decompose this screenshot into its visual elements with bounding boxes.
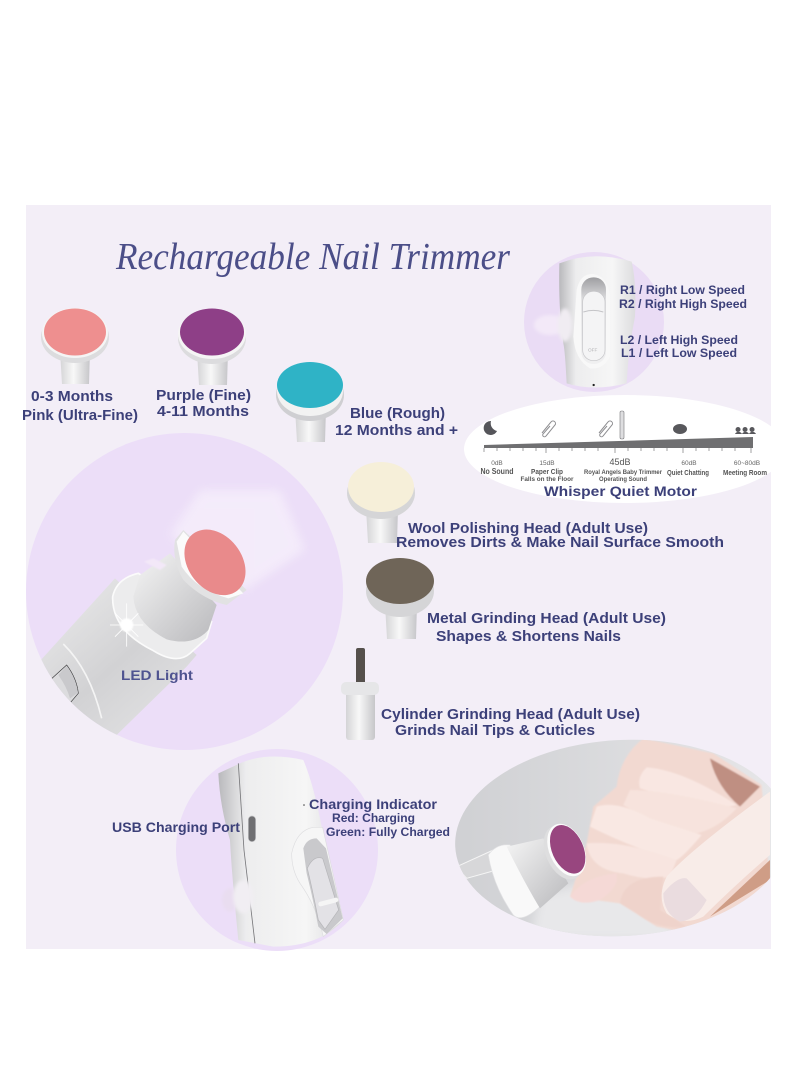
text: charging indicator: Charging Indicator (309, 797, 438, 812)
text: pink head label: 0-3 Months (31, 389, 113, 405)
icon: pink ultra-fine head (41, 308, 109, 384)
text: decibel labels: Meeting Room (723, 468, 767, 477)
text: cylinder head label (381, 707, 640, 739)
text: metal head label: Shapes & Shortens Nails (436, 629, 621, 645)
panel: baby hand photo (450, 735, 775, 940)
text: decibel labels: Falls on the Floor (520, 476, 574, 483)
icon: blue rough head (276, 362, 344, 442)
text: cylinder head label: Cylinder Grinding Head (Adult Use) (381, 707, 640, 723)
text: decibel labels: 0dB (491, 460, 503, 467)
icon: trimmer body with pink head (42, 530, 246, 735)
icon: moon (484, 421, 497, 435)
text: purple head label (156, 388, 251, 420)
text: decibel labels: 60~80dB (734, 460, 760, 467)
panel: background (26, 205, 771, 949)
panel: LED light circle (17, 433, 343, 750)
icon: trimmer with purple head (460, 824, 586, 918)
text: speed labels: R2 / Right High Speed (619, 297, 747, 311)
panel: charging circle (176, 749, 378, 951)
text: pink head label (22, 389, 138, 424)
text: purple head label: 4-11 Months (157, 404, 249, 420)
text: decibel labels: Royal Angels Baby Trimmer (584, 469, 662, 476)
text: decibel labels (480, 457, 767, 483)
chart: decibel scale (484, 437, 753, 453)
text: whisper quiet motor heading: Whisper Quiet Motor (544, 483, 698, 499)
text: decibel labels: 15dB (539, 460, 555, 467)
text: blue head label (335, 406, 458, 439)
text: metal head label (427, 611, 666, 645)
panel: speed switch circle (524, 252, 664, 392)
icon: paper clip operating (599, 421, 612, 437)
icon: baby hand (570, 738, 770, 933)
icon: people (735, 427, 756, 434)
icon: wool polishing head (347, 462, 415, 543)
text: decibel labels: Operating Sound (599, 476, 647, 483)
text: charging indicator: Red: Charging (332, 813, 415, 825)
icon: trimmer switch: OFF (588, 348, 597, 353)
text: blue head label: 12 Months and + (335, 423, 458, 439)
text: USB charging port: USB Charging Port (112, 820, 241, 835)
text: metal head label: Metal Grinding Head (Adult Use) (427, 611, 666, 627)
icon: cylinder grinding head (341, 648, 379, 740)
text: decibel labels: 60dB (681, 460, 697, 467)
icon: small trimmer (620, 411, 624, 439)
text: blue head label: Blue (Rough) (350, 406, 445, 422)
text: decibel labels: Paper Clip (531, 469, 563, 476)
text: charging indicator (309, 797, 450, 839)
icon: light beam (175, 491, 300, 586)
text: decibel labels: No Sound (480, 467, 514, 476)
text: LED light label: LED Light (121, 667, 193, 683)
text: speed labels: L1 / Left Low Speed (621, 346, 737, 360)
text: charging indicator: Green: Fully Charged (326, 827, 450, 839)
text: cylinder head label: Grinds Nail Tips & Cuticles (395, 723, 595, 739)
text: wool head label (396, 521, 724, 551)
panel: whisper quiet motor (464, 395, 786, 503)
text: purple head label: Purple (Fine) (156, 388, 251, 404)
icon: paper clip quiet (542, 421, 555, 437)
text: decibel labels: Quiet Chatting (667, 468, 709, 477)
icon: metal grinding head (366, 558, 434, 639)
text: speed labels (619, 283, 747, 360)
title: Rechargeable Nail Trimmer (115, 236, 510, 278)
text: speed labels: R1 / Right Low Speed (620, 283, 745, 297)
text: pink head label: Pink (Ultra-Fine) (22, 408, 138, 424)
text: speed labels: L2 / Left High Speed (620, 333, 738, 347)
icon: purple fine head (178, 308, 246, 385)
icon: trimmer side view (218, 757, 343, 947)
text: decibel labels: 45dB (609, 457, 631, 467)
text: wool head label: Wool Polishing Head (Adult Use) (408, 521, 648, 537)
icon: speech bubble (673, 424, 687, 434)
text: wool head label: Removes Dirts & Make Nail Surface Smooth (396, 535, 724, 551)
